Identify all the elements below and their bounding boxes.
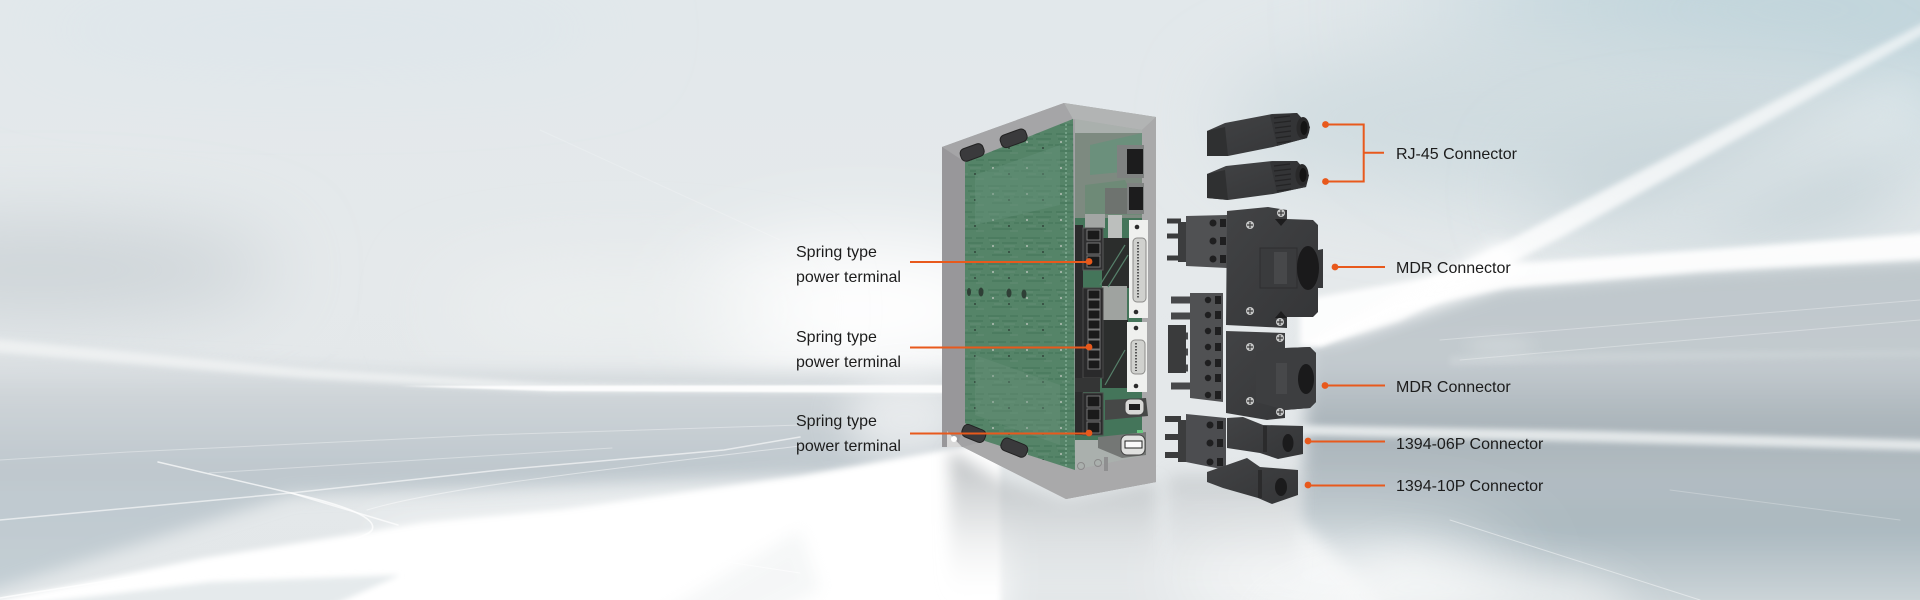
label: spring terminal bottom: Spring type <box>796 413 877 430</box>
1394 ports <box>1098 398 1148 458</box>
label: 1394-10P: 1394-10P Connector <box>1396 478 1544 495</box>
label: 1394-06P: 1394-06P Connector <box>1396 436 1544 453</box>
product reflection on floor <box>950 450 1298 600</box>
spring terminal plugs <box>1165 215 1227 470</box>
label: MDR upper: MDR Connector <box>1396 260 1511 277</box>
1394-06P connector <box>1227 417 1303 459</box>
drive unit with open enclosure <box>942 103 1156 499</box>
label: spring terminal top: power terminal <box>796 269 901 286</box>
RJ-45 jacks <box>1105 145 1144 214</box>
label: RJ-45: RJ-45 Connector <box>1396 146 1518 163</box>
RJ-45 connector plugs <box>1207 113 1310 200</box>
callout leaders: connectors <box>1305 121 1385 488</box>
MDR connector upper <box>1226 207 1323 328</box>
label: spring terminal middle: power terminal <box>796 354 901 371</box>
board front with terminals and ports <box>1075 119 1148 470</box>
1394-10P connector <box>1207 458 1298 504</box>
label: MDR lower: MDR Connector <box>1396 379 1511 396</box>
MDR connector lower <box>1226 331 1316 420</box>
label: spring terminal middle: Spring type <box>796 329 877 346</box>
circuit board rear <box>965 119 1075 470</box>
callout leaders: spring terminals <box>910 258 1092 436</box>
enclosure shell <box>942 103 1156 499</box>
enclosure base plate <box>1066 456 1156 499</box>
D-sub sockets <box>1127 220 1148 392</box>
rubber feet <box>959 128 1029 459</box>
label: spring terminal top: Spring type <box>796 244 877 261</box>
label: spring terminal bottom: power terminal <box>796 438 901 455</box>
